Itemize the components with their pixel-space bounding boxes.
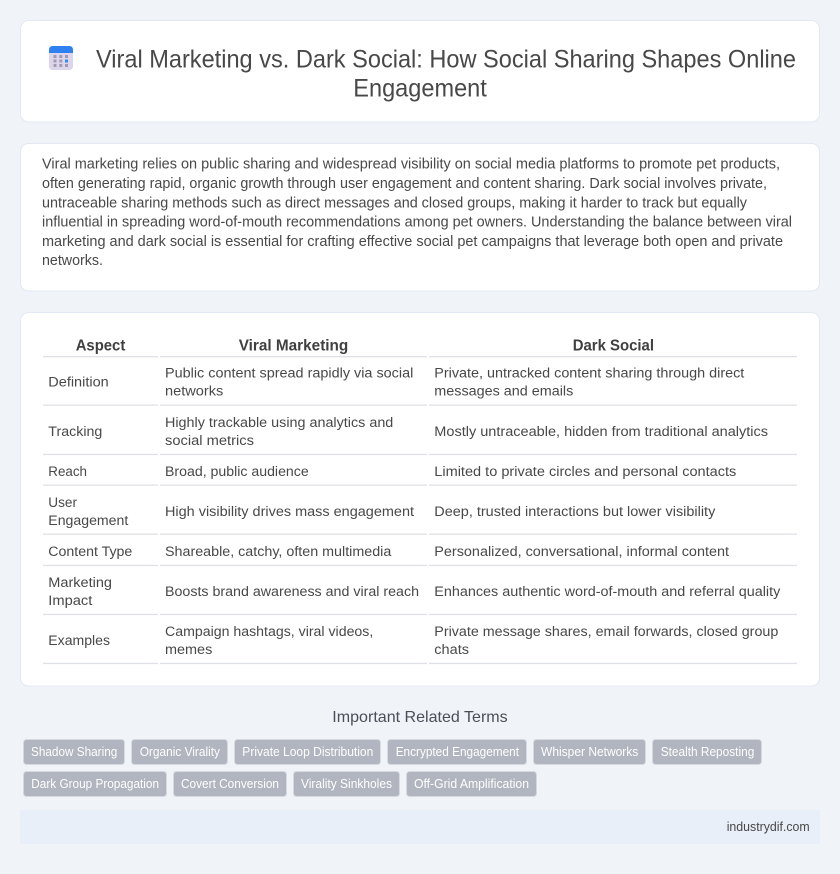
tag: off-grid amplification: Off-Grid Amplification xyxy=(414,777,529,791)
table header row: Aspect xyxy=(76,338,126,355)
table header row: Dark Social xyxy=(573,338,654,355)
row: marketing impact: Impact xyxy=(48,593,92,609)
icon: calendar xyxy=(49,46,73,70)
heading: related terms: Important Related Terms xyxy=(332,709,508,726)
panel: intro paragraph xyxy=(20,144,820,291)
row: user engagement: Deep, trusted interactions but lower visibility xyxy=(434,504,716,520)
tag: virality sinkholes xyxy=(294,772,400,796)
text block: intro: Viral marketing relies on public sharing and widespread visibility on social media platforms to promote pet products, xyxy=(42,156,780,172)
row: definition: Private, untracked content sharing through direct xyxy=(434,366,744,382)
footer xyxy=(20,810,820,844)
row: tracking: Mostly untraceable, hidden from traditional analytics xyxy=(434,424,768,440)
tag: shadow sharing xyxy=(24,740,124,764)
tag: dark group propagation: Dark Group Propagation xyxy=(31,777,159,791)
row: reach: Limited to private circles and personal contacts xyxy=(434,464,736,480)
tag: stealth reposting: Stealth Reposting xyxy=(661,745,754,759)
row: marketing impact xyxy=(48,575,781,609)
tag list: related terms xyxy=(24,740,762,796)
row: marketing impact: Boosts brand awareness and viral reach xyxy=(165,584,419,600)
text block: intro: untraceable sharing methods such as direct messages and closed groups, making it harder to track but equally xyxy=(42,195,748,211)
row: definition xyxy=(48,366,744,400)
tag: stealth reposting xyxy=(652,740,762,764)
row: user engagement: User xyxy=(48,495,77,511)
tag: encrypted engagement xyxy=(388,740,526,764)
row: user engagement: High visibility drives mass engagement xyxy=(165,504,414,520)
tag: whisper networks xyxy=(534,740,646,764)
row: marketing impact: Marketing xyxy=(48,575,112,591)
row: content type: Shareable, catchy, often multimedia xyxy=(165,544,391,560)
row: examples xyxy=(48,624,778,658)
text block: intro: marketing and dark social is essential for crafting effective social pet campaigns that leverage both open and private xyxy=(42,234,783,250)
row: examples: Private message shares, email forwards, closed group xyxy=(434,624,778,640)
row: reach xyxy=(48,464,736,480)
footer: industrydif.com xyxy=(727,819,810,834)
row: user engagement xyxy=(48,495,716,529)
tag: private loop distribution: Private Loop Distribution xyxy=(242,745,373,759)
tag: organic virality: Organic Virality xyxy=(140,745,221,759)
text block: intro: influential in spreading word-of-mouth recommendations among pet owners. Understanding the balance between viral xyxy=(42,214,792,230)
row: tracking: social metrics xyxy=(165,433,254,449)
title: Viral Marketing vs. Dark Social: How Social Sharing Shapes Online xyxy=(96,46,796,74)
row: content type: Personalized, conversational, informal content xyxy=(434,544,729,560)
row: definition: networks xyxy=(165,384,223,400)
title: Engagement xyxy=(353,75,487,103)
tag: covert conversion: Covert Conversion xyxy=(181,777,279,791)
tag: dark group propagation xyxy=(24,772,166,796)
title xyxy=(96,46,796,103)
row: examples: memes xyxy=(165,642,212,658)
row: reach: Reach xyxy=(48,464,87,480)
row: examples: Examples xyxy=(48,633,110,649)
panel: title header xyxy=(20,20,820,122)
table header row: Viral Marketing xyxy=(239,338,348,355)
row: definition: Public content spread rapidly via social xyxy=(165,366,413,382)
tag: private loop distribution xyxy=(234,740,380,764)
tag: shadow sharing: Shadow Sharing xyxy=(31,745,117,759)
row: examples: Campaign hashtags, viral videos, xyxy=(165,624,373,640)
text block: intro xyxy=(42,156,792,269)
panel: comparison table xyxy=(20,312,820,686)
row: marketing impact: Enhances authentic word-of-mouth and referral quality xyxy=(434,584,781,600)
row: tracking: Tracking xyxy=(48,424,102,440)
row: content type: Content Type xyxy=(48,544,132,560)
tag: whisper networks: Whisper Networks xyxy=(541,745,638,759)
text block: intro: networks. xyxy=(42,253,103,269)
tag: organic virality xyxy=(132,740,228,764)
row: tracking: Highly trackable using analytics and xyxy=(165,415,393,431)
tag: virality sinkholes: Virality Sinkholes xyxy=(301,777,392,791)
row: definition: Definition xyxy=(48,375,109,391)
row: tracking xyxy=(48,415,768,449)
tag: covert conversion xyxy=(174,772,286,796)
row: content type xyxy=(48,544,729,560)
tag: encrypted engagement: Encrypted Engagement xyxy=(396,745,519,759)
row: examples: chats xyxy=(434,642,469,658)
table header row xyxy=(76,338,654,355)
text block: intro: often generating rapid, organic growth through user engagement and content sharing. Dark social involves private, xyxy=(42,176,767,192)
tag: off-grid amplification xyxy=(406,772,536,796)
row: reach: Broad, public audience xyxy=(165,464,309,480)
row: user engagement: Engagement xyxy=(48,513,128,529)
row: definition: messages and emails xyxy=(434,384,573,400)
